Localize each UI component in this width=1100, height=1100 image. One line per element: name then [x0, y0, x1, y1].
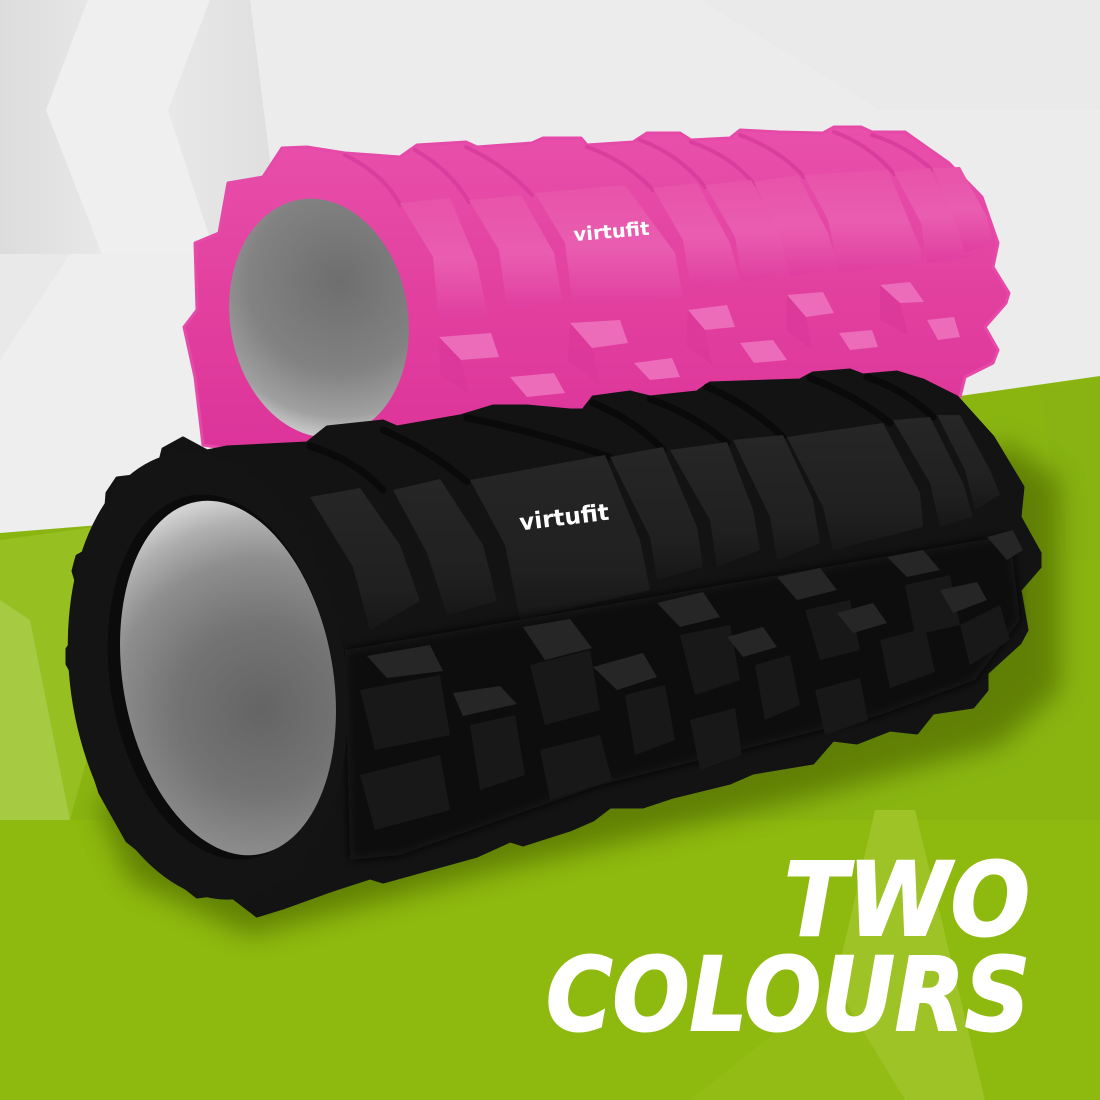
pink roller silhouette	[184, 127, 1009, 460]
black roller raised panels	[310, 415, 1000, 630]
black roller ground shadow	[95, 440, 1060, 935]
black roller lit bumps	[367, 530, 1023, 716]
background: light grey panel	[0, 0, 1100, 600]
pink roller hollow core	[212, 186, 426, 450]
background: green floor panel	[0, 376, 1100, 1100]
pink foam roller	[184, 127, 1009, 460]
title line 2: COLOURS	[546, 936, 1030, 1055]
black roller silhouette	[67, 370, 1040, 916]
pink roller top grooves	[345, 132, 932, 205]
pink roller lower bumps	[439, 282, 960, 397]
black roller logo: virtufit	[518, 500, 610, 536]
black roller top grooves	[310, 377, 933, 490]
pink roller lower bump sides	[439, 285, 908, 395]
pink roller logo: virtufit	[573, 218, 650, 246]
black roller hole bevel	[83, 478, 359, 876]
black roller end face	[40, 434, 376, 918]
title: two colours	[546, 841, 1030, 1055]
black roller hollow core	[94, 483, 362, 873]
black foam roller	[40, 370, 1040, 918]
black roller lower shadow area	[345, 535, 1020, 860]
title line 1: TWO	[784, 841, 1030, 960]
black roller lower blocks	[360, 575, 1010, 830]
pink roller raised panels	[400, 167, 993, 320]
